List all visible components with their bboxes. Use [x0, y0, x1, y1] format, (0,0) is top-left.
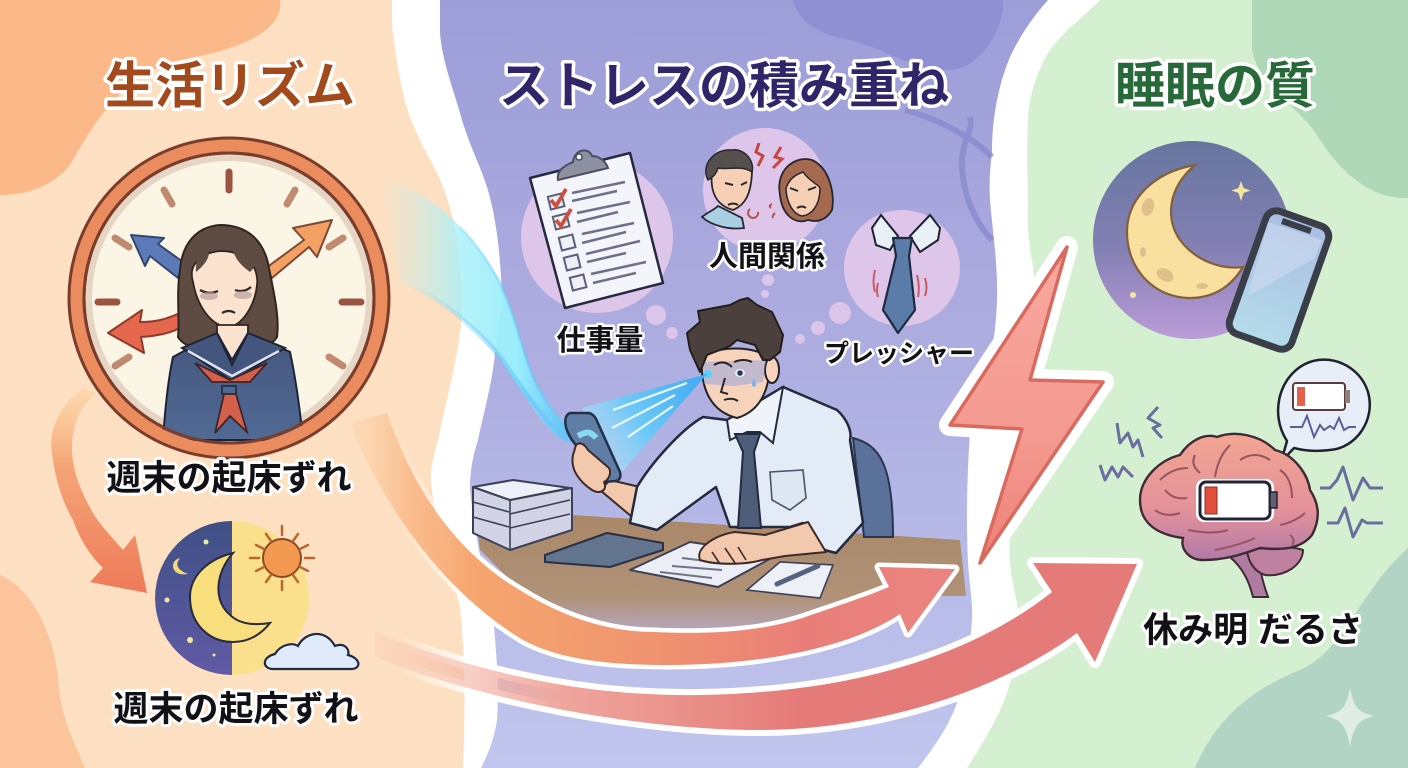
blob: top-right green: [1252, 0, 1408, 198]
arrow: clock hand right: [266, 220, 332, 278]
label: weekend wake-up shift (upper): 週末の起床ずれ: [106, 459, 352, 498]
icon: moon with smartphone: [1093, 141, 1332, 352]
icon: brain wave signals: [1100, 407, 1383, 537]
thought bubbles: [646, 274, 851, 344]
icon: tight necktie: [844, 210, 960, 333]
arrow: rhythm to stress: [350, 413, 955, 665]
title: lifestyle rhythm: 生活リズム: [105, 58, 355, 114]
icon: lightning bolt: [950, 247, 1103, 563]
panel: accumulated stress background: [440, 0, 1048, 768]
figure: schoolgirl: [163, 225, 303, 440]
icon: speech bubble with low battery: [1278, 360, 1370, 462]
label: workload: 仕事量: [556, 324, 644, 357]
icon: small cloud: [265, 634, 358, 669]
hair: [687, 298, 783, 372]
title: accumulated stress: ストレスの積み重ね: [499, 58, 949, 114]
eye glow band: [703, 360, 766, 386]
forearm holding phone: [600, 480, 640, 522]
arrow: clock hand left: [108, 310, 184, 353]
blob: top darker purple: [793, 0, 1003, 70]
stream: blue light flowing from phone: [380, 177, 575, 442]
panel: lifestyle rhythm background: [0, 0, 465, 768]
forearm and hand on papers: [699, 522, 826, 564]
arrow: rhythm to sleep: [375, 563, 1137, 730]
blob: bottom-left orange: [0, 575, 85, 768]
label: pressure: プレッシャー: [824, 340, 974, 368]
panel: sleep quality background: [967, 0, 1408, 768]
collar: [727, 387, 783, 443]
necktie: [735, 434, 761, 528]
arrow: clock down to day-night icon: [51, 388, 147, 593]
shirt: [630, 387, 863, 553]
icon: two people in conflict: [702, 128, 833, 252]
label: post-holiday sluggishness: 休み明 だるさ: [1143, 611, 1363, 650]
title: sleep quality: 睡眠の質: [1115, 58, 1315, 114]
clock ticks: [98, 172, 361, 366]
icon: clock with schoolgirl: [69, 138, 389, 458]
chair: [853, 438, 893, 537]
label: human relations: 人間関係: [709, 240, 825, 273]
pocket: [770, 470, 806, 510]
head: [702, 348, 770, 418]
icon: brain with battery: [1140, 434, 1318, 597]
icon: day and night circle: [155, 521, 358, 675]
label: weekend wake-up shift (lower): 週末の起床ずれ: [113, 690, 359, 729]
sun: [263, 539, 301, 577]
decorative swirl lines: [905, 110, 992, 240]
icon: smartphone in hand: [565, 413, 620, 492]
icon: clipboard task list: [521, 150, 673, 313]
icon: beams of blue light: [582, 374, 707, 472]
illustration: stressed man at desk: [600, 298, 893, 564]
blob: bottom-right teal: [1195, 548, 1408, 768]
arrow: clock hand upper left: [131, 235, 183, 278]
blob: top-left orange: [0, 0, 280, 195]
icon: sparkle watermark: [1326, 688, 1374, 746]
illustration: stacked papers and tablet: [473, 480, 833, 598]
illustration: desk: [475, 508, 966, 636]
